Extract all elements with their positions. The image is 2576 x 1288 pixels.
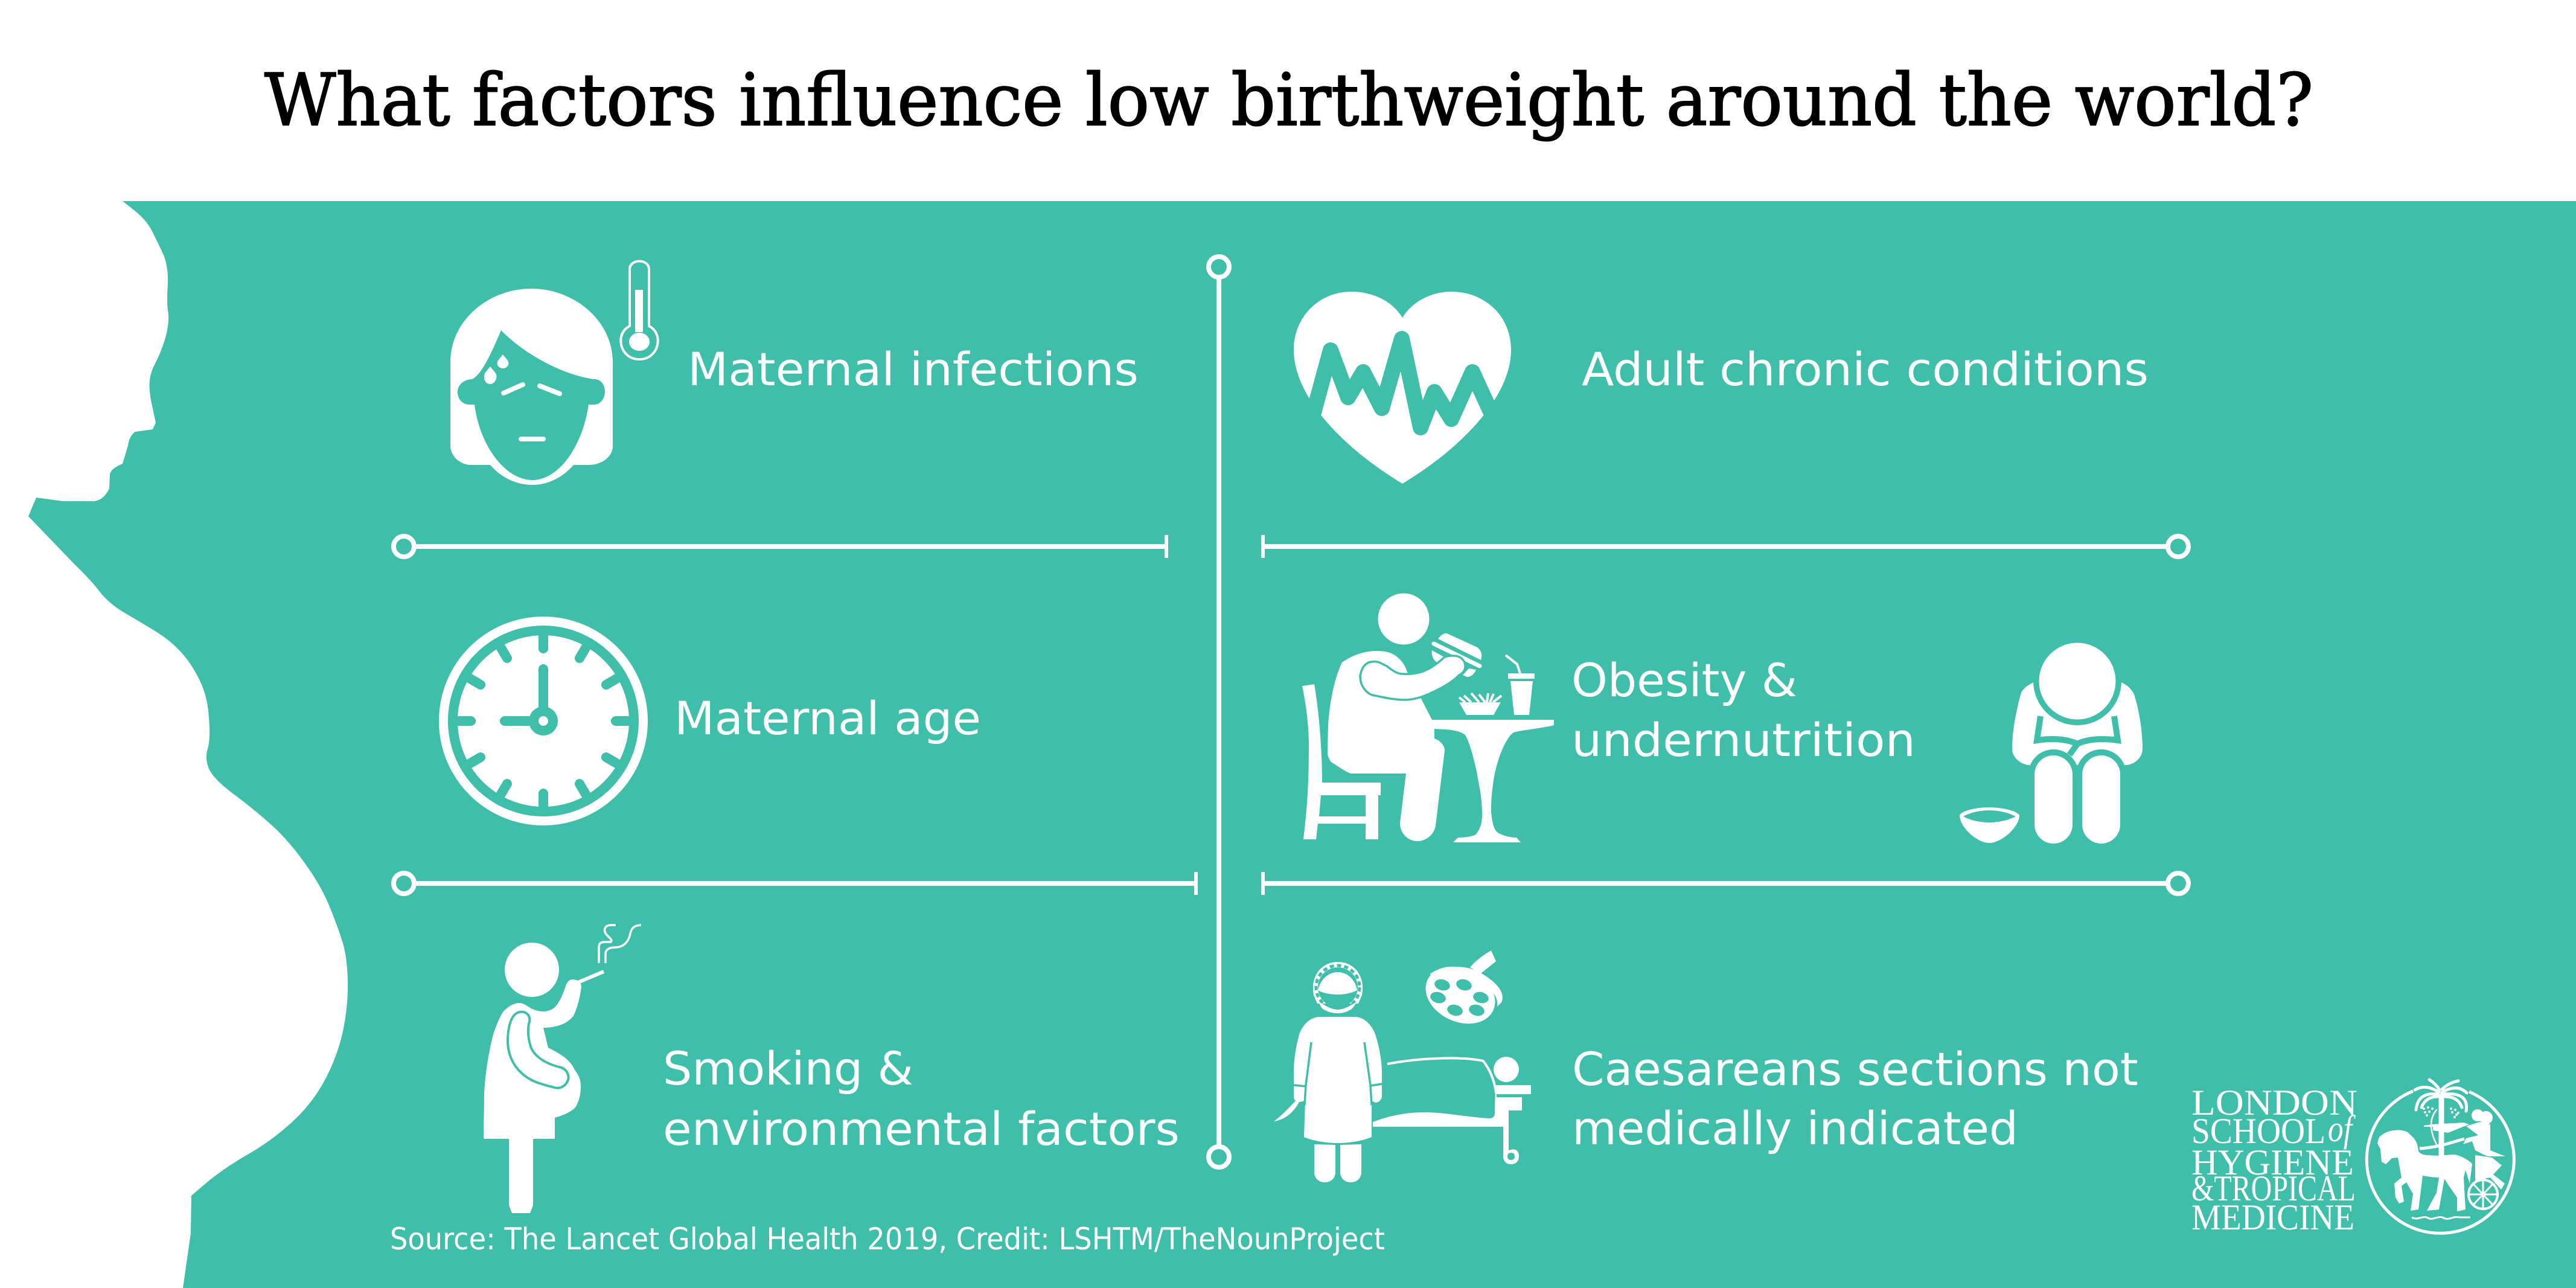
icon: pregnant woman smoking: [484, 925, 641, 1213]
icon: surgeon, operating lamp and patient on bed: [1274, 950, 1531, 1182]
title: What factors influence low birthweight around the world?: [264, 59, 2313, 143]
label: caesarean sections: Caesareans sections not: [1572, 1042, 2138, 1096]
icon: feverish woman with thermometer: [450, 261, 658, 485]
surgeon gown: [1294, 1017, 1382, 1143]
scalpel: [1274, 1098, 1300, 1121]
logo: school wordmark: MEDICINE: [2191, 1197, 2354, 1237]
arrow, arms and reins: [2424, 1123, 2469, 1133]
body: [1328, 651, 1445, 841]
fries: [1459, 702, 1501, 715]
divider: left lower: [394, 872, 1196, 895]
surgeon head: [1313, 962, 1363, 1013]
vertical divider with end circles: [1209, 257, 1229, 1167]
operating bed: [1373, 1085, 1531, 1164]
arm: [1360, 656, 1465, 700]
charioteers: [2472, 1109, 2484, 1121]
logo: school wordmark: SCHOOL: [2191, 1111, 2325, 1151]
water waves: [2412, 1217, 2470, 1219]
label: adult chronic conditions: Adult chronic conditions: [1582, 342, 2149, 396]
icon: undernourished person with empty bowl: [1960, 637, 2143, 844]
table: [1432, 720, 1554, 842]
patient head: [1494, 1057, 1519, 1082]
label: caesarean sections: [1572, 1042, 2138, 1155]
operating lamp: [1470, 950, 1496, 973]
divider: right lower: [1263, 872, 2188, 895]
divider: right upper: [1263, 535, 2188, 558]
source credit: Source: The Lancet Global Health 2019, Credit: LSHTM/TheNounProject: [390, 1222, 1385, 1257]
logo: school wordmark: HYGIENE: [2191, 1142, 2354, 1182]
label: obesity and undernutrition: undernutrition: [1571, 713, 1916, 767]
icon: clock: [439, 617, 648, 825]
label: obesity and undernutrition: [1571, 653, 1916, 767]
icon: obese person eating at a table: [1302, 593, 1554, 842]
label: obesity and undernutrition: Obesity &: [1571, 653, 1797, 707]
label: maternal infections: Maternal infections: [688, 342, 1139, 396]
chariot body: [2475, 1155, 2505, 1190]
label: smoking and environmental factors: Smoking &: [663, 1042, 913, 1095]
drink: [1508, 673, 1535, 679]
divider: left upper: [394, 535, 1166, 558]
burger: [1438, 633, 1481, 660]
logo: school wordmark: &TROPICAL: [2191, 1168, 2356, 1208]
pregnant woman silhouette: [0, 201, 348, 1288]
chair: [1302, 684, 1381, 839]
palm: [2415, 1080, 2467, 1155]
wheel: [2469, 1180, 2498, 1209]
label: smoking and environmental factors: [663, 1042, 1180, 1156]
label: maternal age: Maternal age: [674, 691, 981, 745]
horse: [2377, 1130, 2472, 1211]
label: caesarean sections: medically indicated: [1572, 1101, 2018, 1155]
sheet outline: [1387, 1058, 1496, 1093]
surgeon legs: [1314, 1144, 1335, 1182]
logo: school wordmark: [2191, 1083, 2357, 1237]
label: smoking and environmental factors: environmental factors: [663, 1102, 1180, 1156]
logo: school wordmark: of: [2328, 1109, 2356, 1150]
logo: school wordmark: LONDON: [2191, 1083, 2357, 1123]
logo: seal with palm, horse and chariot: [2367, 1080, 2514, 1233]
icon: heart with heartbeat: [1294, 292, 1511, 484]
